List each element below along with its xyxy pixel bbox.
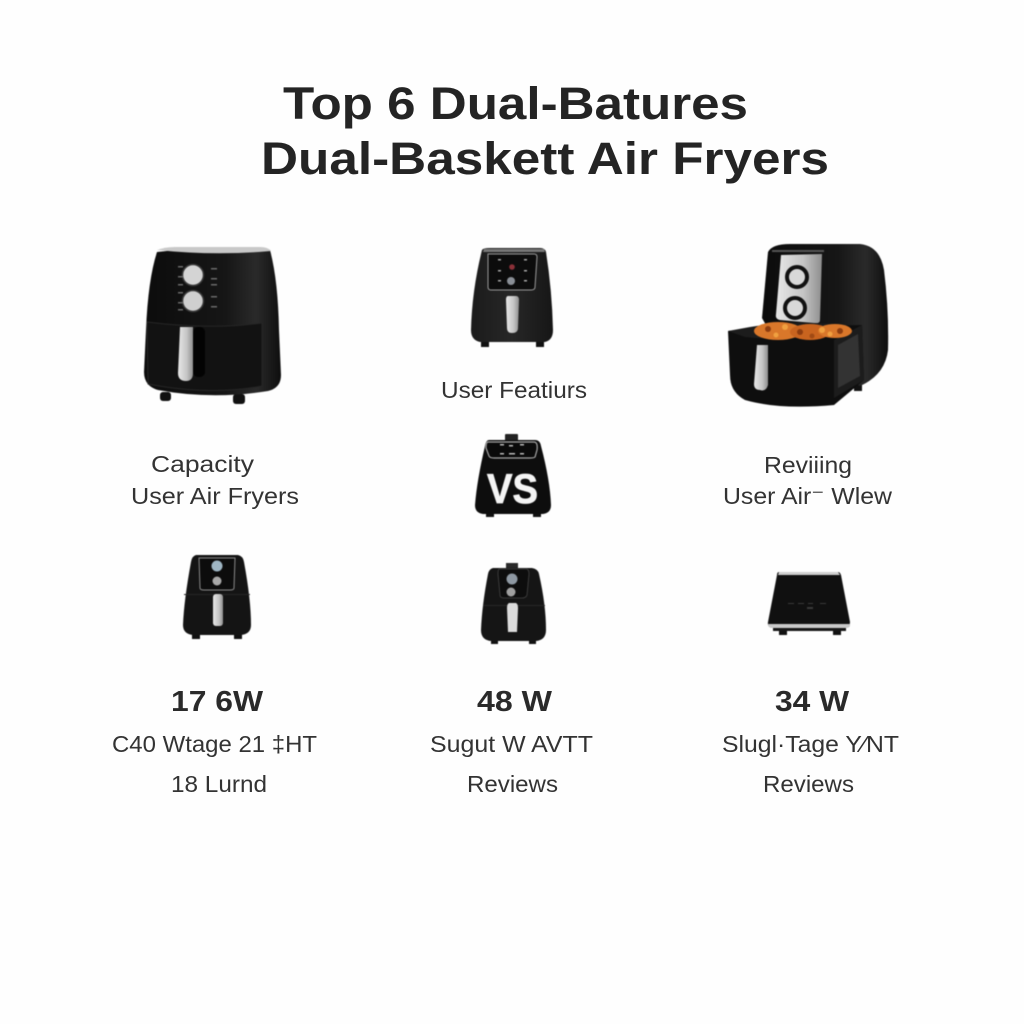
icon: VS air fryer — [475, 434, 551, 517]
stat column: centre: Reviews — [467, 771, 558, 797]
icon: lower-centre air fryer — [481, 563, 546, 644]
stat column: right: Reviews — [763, 771, 854, 797]
stat column: centre: 48 W — [477, 686, 553, 718]
title — [261, 78, 829, 184]
text: right review label: Reviiing — [764, 452, 852, 478]
text: right review label: User Air⁻ Wlew — [723, 483, 893, 509]
text: top centre label: User Featiurs — [441, 377, 587, 403]
stat column: left: C40 Wtage 21 ‡HT — [112, 731, 317, 757]
title: Dual-Baskett Air Fryers — [261, 133, 829, 184]
text: right review label — [723, 452, 893, 509]
stat column: left: 18 Lurnd — [171, 771, 267, 797]
text: VS: VS — [487, 465, 538, 512]
stat column: left — [112, 686, 317, 797]
stat column: centre — [430, 686, 593, 797]
icon: air fryer with dials, top left — [144, 247, 281, 404]
title: Top 6 Dual-Batures — [283, 78, 748, 129]
text: left capacity label: Capacity — [151, 451, 254, 477]
icon: digital air fryer, top centre — [471, 248, 553, 347]
stat column: right: Slugl·Tage Y⁄NT — [722, 731, 899, 757]
stat column: left: 17 6W — [171, 686, 264, 718]
stat column: centre: Sugut W AVTT — [430, 731, 593, 757]
stat column: right: 34 W — [775, 686, 850, 718]
icon: lower-left air fryer — [183, 555, 251, 639]
stat column: right — [722, 686, 899, 797]
text: left capacity label: User Air Fryers — [131, 483, 299, 509]
icon: flat black device — [768, 572, 850, 635]
text: left capacity label — [131, 451, 299, 509]
icon: open-basket air fryer, top right — [728, 244, 888, 407]
